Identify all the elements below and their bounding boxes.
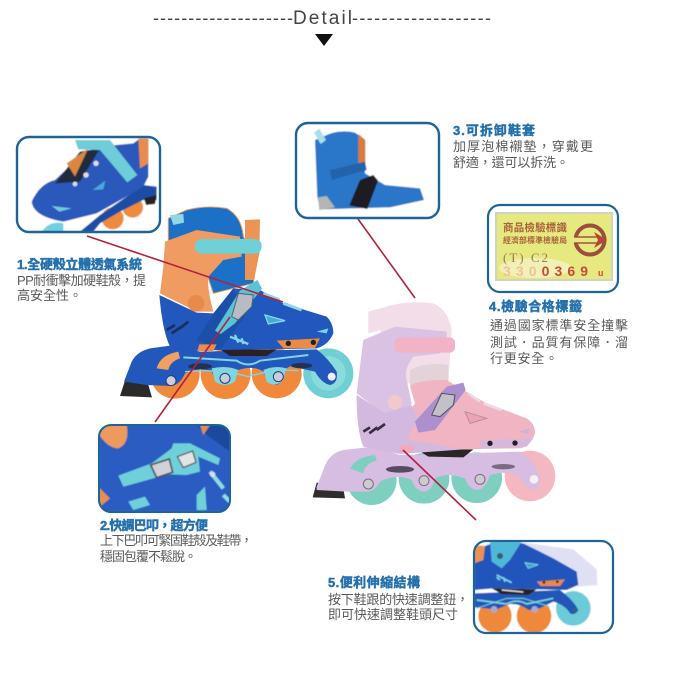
panel: inset toe closeup <box>17 137 160 232</box>
panel: inspection label: 經濟部標準檢驗局 <box>503 235 567 245</box>
leader line: boot shell <box>87 236 283 302</box>
text block: feature 4: 通過國家標準安全撞擊 <box>490 318 628 333</box>
text block: feature 5: 5.便利伸縮結構 <box>328 575 420 590</box>
panel: inspection label: (T) C2 <box>503 250 548 265</box>
infographic canvas <box>16 10 628 634</box>
text block: feature 1: 1.全硬殼立體透氣系統 <box>17 257 142 272</box>
leader line: buckle <box>155 317 230 422</box>
panel: inspection label: 商品檢驗標識 <box>503 221 568 234</box>
text block: feature 4 <box>489 299 628 366</box>
text block: feature 3: 舒適，還可以拆洗。 <box>453 155 569 170</box>
panel: inset buckle closeup <box>99 425 230 512</box>
text block: feature 5: 按下鞋跟的快速調整鈕， <box>328 592 469 607</box>
icon: down arrow <box>315 34 333 46</box>
leader line: extension <box>403 450 476 520</box>
panel: inspection label <box>488 205 618 292</box>
text block: feature 2: 穩固包覆不鬆脫。 <box>100 549 197 564</box>
text block: feature 2: 上下巴叩可緊固鞋殼及鞋帶， <box>100 533 253 548</box>
text block: feature 3: 3.可拆卸鞋套 <box>453 123 535 138</box>
section heading: Detail: Detail <box>293 8 352 29</box>
text block: feature 1 <box>17 257 146 303</box>
text block: feature 4: 測試．品質有保障．溜 <box>490 335 628 350</box>
text block: feature 4: 行更安全。 <box>490 351 558 366</box>
text block: feature 1: PP耐衝擊加硬鞋殼，提 <box>17 273 146 288</box>
blue inline skate <box>120 207 353 399</box>
text block: feature 3 <box>453 123 593 170</box>
text block: feature 2: 2.快調巴叩，超方便 <box>100 518 208 533</box>
pink inline skate <box>313 302 555 505</box>
text block: feature 5 <box>328 575 469 622</box>
section heading: Detail: -------------------- <box>153 8 293 28</box>
panel: inset extension closeup <box>474 541 613 633</box>
leader line: liner <box>358 219 415 298</box>
text block: feature 3: 加厚泡棉襯墊，穿戴更 <box>453 139 593 154</box>
panel: inspection label: 330 0369 <box>503 263 588 279</box>
text block: feature 1: 高安全性。 <box>17 288 82 303</box>
section heading: Detail <box>153 8 491 29</box>
text block: feature 2 <box>100 518 253 564</box>
panel: inspection label: u <box>598 268 604 278</box>
text block: feature 5: 即可快速調整鞋頭尺寸 <box>328 607 458 622</box>
panel: inset removable liner <box>296 123 439 218</box>
section heading: Detail: ------------------- <box>352 8 491 28</box>
text block: feature 4: 4.檢驗合格標籤 <box>489 299 582 314</box>
